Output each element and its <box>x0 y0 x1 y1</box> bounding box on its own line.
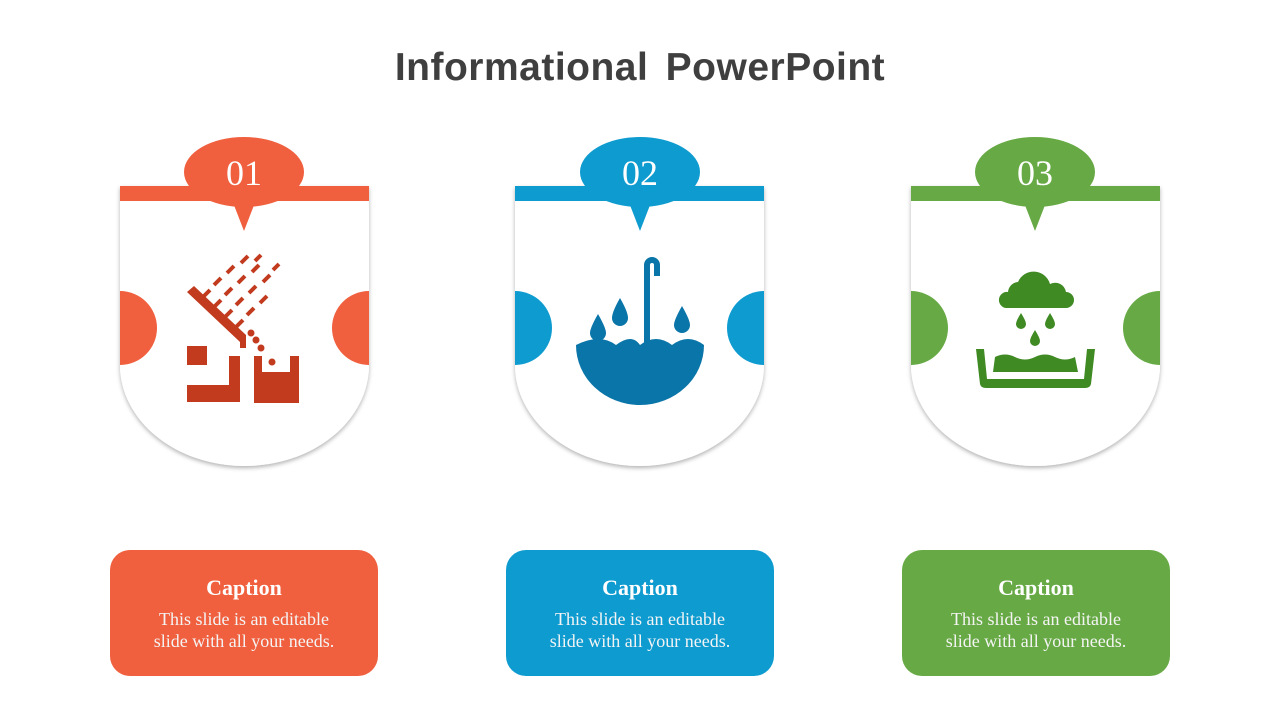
icon: house in rain <box>187 255 299 403</box>
badge 02 <box>580 137 700 231</box>
caption box 2: slide with all your needs. <box>550 631 730 651</box>
caption box 1: slide with all your needs. <box>154 631 334 651</box>
caption box 3: This slide is an editable <box>951 609 1121 629</box>
card 1 <box>118 137 372 470</box>
icon: rain into basin <box>976 272 1095 388</box>
card 2 <box>512 137 766 470</box>
badge 01: 01 <box>226 153 262 193</box>
caption box 3: slide with all your needs. <box>946 631 1126 651</box>
icon: umbrella <box>576 257 704 405</box>
caption box 3: Caption <box>998 575 1074 600</box>
title: Informational PowerPoint <box>395 46 885 89</box>
caption box 2 <box>506 550 774 676</box>
card 3 <box>908 137 1162 470</box>
badge 02: 02 <box>622 153 658 193</box>
caption box 2: Caption <box>602 575 678 600</box>
caption box 1: This slide is an editable <box>159 609 329 629</box>
caption box 3 <box>902 550 1170 676</box>
badge 03: 03 <box>1017 153 1053 193</box>
caption box 1: Caption <box>206 575 282 600</box>
caption box 2: This slide is an editable <box>555 609 725 629</box>
caption box 1 <box>110 550 378 676</box>
badge 01 <box>184 137 304 231</box>
diagram <box>118 137 1162 470</box>
badge 03 <box>975 137 1095 231</box>
